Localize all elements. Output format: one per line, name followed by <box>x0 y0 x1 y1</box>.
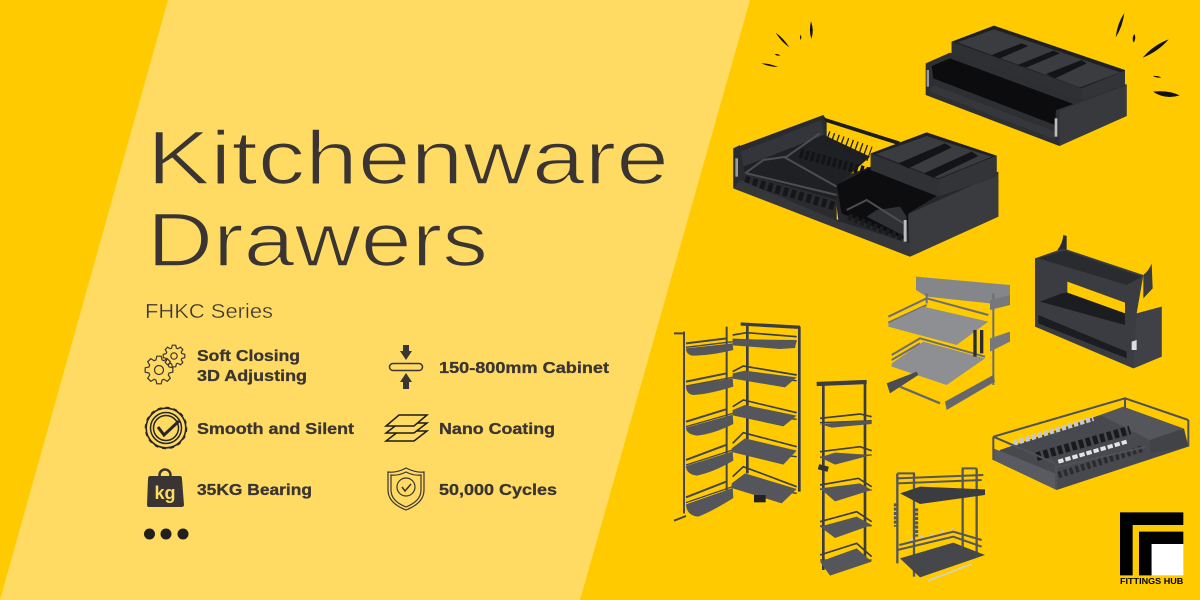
title: Drawers <box>147 198 488 283</box>
burst marks left <box>761 21 813 67</box>
icon: gears <box>145 345 185 384</box>
product: swing-out pantry door <box>674 324 800 521</box>
feature: soft closing <box>197 348 307 385</box>
icon: kg weight: kg <box>154 483 176 503</box>
product: low two-tier rack <box>896 468 985 581</box>
feature: smooth and silent: Smooth and Silent <box>197 421 355 438</box>
products: pull-up unit and basket <box>993 235 1188 490</box>
product: dish basket <box>993 398 1188 490</box>
icon: layers <box>386 415 427 441</box>
title <box>147 116 669 283</box>
burst marks right <box>1116 13 1180 97</box>
subtitle: FHKC Series <box>145 301 273 323</box>
product: stacked drawer upper <box>926 26 1127 146</box>
feature: soft closing: Soft Closing <box>197 348 300 365</box>
logo: Fittings Hub <box>1120 512 1184 586</box>
feature list <box>145 345 610 510</box>
panel: light diagonal band <box>0 0 750 600</box>
product: corner pull-out light grey <box>887 277 1010 410</box>
icon: seal check <box>146 408 186 448</box>
icon: cabinet width arrows <box>390 345 422 389</box>
dots <box>144 528 188 540</box>
icon: shield check <box>388 468 424 510</box>
product: tall narrow rack <box>817 382 872 576</box>
feature: soft closing: 3D Adjusting <box>197 368 307 385</box>
icon: kg weight <box>147 470 184 507</box>
title: Kitchenware <box>147 116 669 201</box>
product: dish rack drawer with tray <box>733 115 998 257</box>
feature: bearing: 35KG Bearing <box>197 482 312 499</box>
feature: cycles: 50,000 Cycles <box>439 482 557 499</box>
sparkle lines and two drawers <box>733 13 1180 257</box>
feature: nano coating: Nano Coating <box>439 421 555 438</box>
feature: cabinet size: 150-800mm Cabinet <box>439 360 610 377</box>
logo: Fittings Hub: FITTINGS HUB <box>1120 577 1184 586</box>
product: two-tier pull-down unit <box>1035 235 1162 368</box>
products: pantry racks and corner units <box>674 277 1010 581</box>
